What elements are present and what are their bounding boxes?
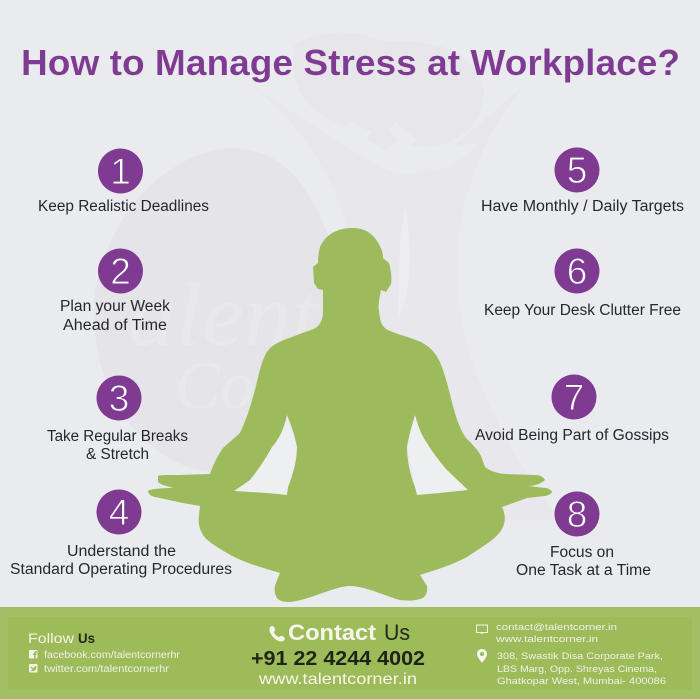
- tip 3: [47, 376, 188, 463]
- social links: twitter.com/talentcornerhr: [44, 664, 170, 675]
- address block: 308, Swastik Disa Corporate Park,: [497, 651, 663, 662]
- tip 7: [475, 374, 669, 444]
- tip 4: Standard Operating Procedures: [10, 561, 232, 578]
- tip 3: & Stretch: [86, 446, 149, 463]
- tip 8: 8: [567, 494, 587, 535]
- tip 8: One Task at a Time: [516, 562, 651, 579]
- tip 2: [60, 248, 170, 334]
- contact block: www.talentcorner.in: [258, 671, 417, 688]
- contact block: +91 22 4244 4002: [251, 648, 425, 670]
- social links: [28, 630, 181, 675]
- tip 2: 2: [110, 251, 131, 292]
- tip 3: 3: [109, 378, 129, 419]
- tip 3: Take Regular Breaks: [47, 428, 188, 445]
- meditating figure silhouette: [148, 228, 552, 602]
- tip 8: [516, 492, 651, 579]
- tip 1: Keep Realistic Deadlines: [38, 198, 209, 215]
- tip 2: Ahead of Time: [63, 317, 167, 334]
- address block: Ghatkopar West, Mumbai- 400086: [497, 676, 666, 687]
- tip 1: [38, 148, 209, 215]
- contact block: Us: [384, 620, 410, 645]
- social links: Follow: [28, 630, 75, 646]
- tip 5: Have Monthly / Daily Targets: [481, 198, 684, 215]
- tip 6: [484, 248, 681, 319]
- background watermark logo: alent: [128, 266, 320, 365]
- address block: [476, 622, 666, 687]
- tip 5: 5: [567, 150, 587, 191]
- tip 4: 4: [109, 492, 129, 533]
- address block: contact@talentcorner.in: [496, 622, 617, 633]
- address block: www.talentcorner.in: [495, 634, 598, 645]
- tip 1: 1: [110, 151, 131, 192]
- contact block: [251, 620, 425, 688]
- tip 6: Keep Your Desk Clutter Free: [484, 302, 681, 319]
- tip 4: [10, 490, 232, 578]
- address block: LBS Marg, Opp. Shreyas Cinema,: [497, 664, 657, 675]
- tip 4: Understand the: [67, 543, 176, 560]
- social links: facebook.com/talentcornerhr: [44, 650, 181, 661]
- background watermark logo: [94, 33, 560, 520]
- tip 7: Avoid Being Part of Gossips: [475, 427, 669, 444]
- social links: Us: [78, 630, 95, 646]
- background watermark logo: Corner: [175, 347, 371, 423]
- tip 6: 6: [567, 251, 587, 292]
- tip 8: Focus on: [550, 544, 614, 561]
- tip 7: 7: [564, 377, 584, 418]
- tip 2: Plan your Week: [60, 298, 170, 315]
- footer band: [0, 607, 700, 699]
- contact block: Contact: [288, 620, 377, 645]
- tip 5: [481, 148, 684, 215]
- title: How to Manage Stress at Workplace?: [21, 42, 680, 83]
